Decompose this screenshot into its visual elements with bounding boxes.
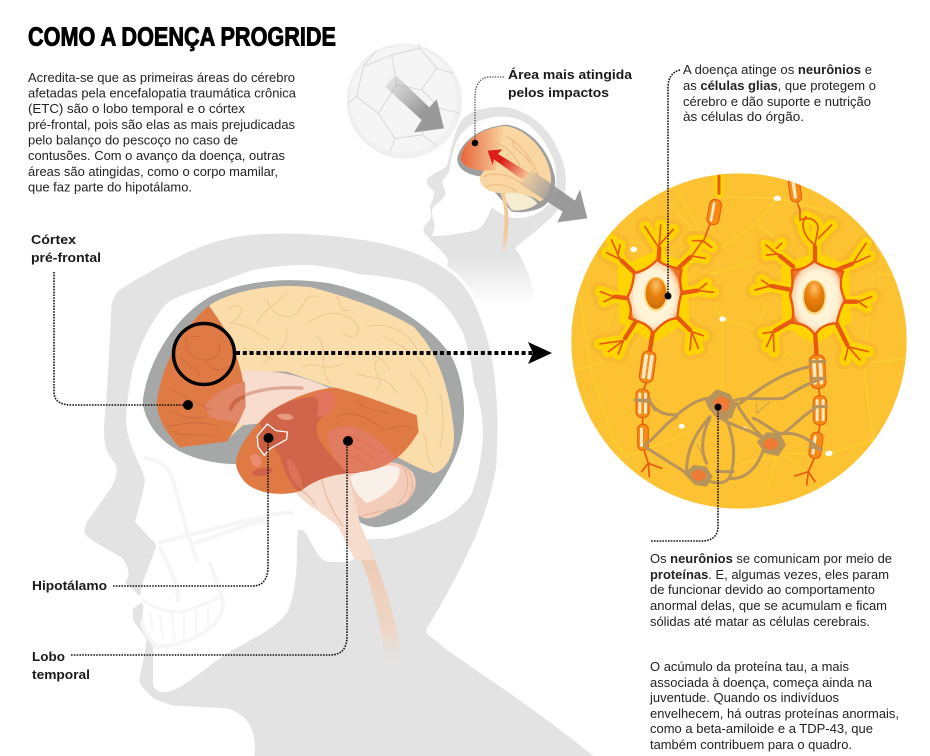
text: proteins: anormal delas, que se acumulam e ficam — [650, 599, 887, 613]
intro text block: que faz parte do hipotálamo. — [28, 180, 192, 194]
small head silhouette — [420, 107, 566, 310]
callout lines and dots: brain regions — [54, 272, 353, 655]
grey skull cavity — [143, 280, 464, 527]
text: proteins: sólidas até matar as células cerebrais. — [650, 615, 870, 629]
neuron circle panel — [571, 173, 907, 509]
intro text block: áreas são atingidas, como o corpo mamilar, — [28, 165, 278, 179]
temporal orange zone — [236, 388, 419, 494]
intro text block: Acredita-se que as primeiras áreas do cérebro — [28, 71, 295, 85]
text: proteins: Os neurônios se comunicam por meio de — [650, 552, 892, 566]
large brain — [143, 280, 464, 560]
text: tau protein: juventude. Quando os indivíduos — [649, 691, 839, 705]
text: tau protein: como a beta-amiloide e a TDP-43, que — [650, 722, 873, 736]
sick neurons — [635, 362, 827, 487]
labels: brain regions: pré-frontal — [31, 250, 101, 265]
inner pale structure — [205, 371, 333, 425]
labels: brain regions: Lobo — [32, 649, 65, 664]
text: proteins — [650, 552, 892, 629]
label: impact area: Área mais atingida — [508, 67, 633, 82]
callout line: impact area — [472, 77, 504, 146]
small cerebrum — [461, 126, 551, 202]
labels: brain regions: Hipotálamo — [32, 578, 107, 593]
text: tau protein — [649, 660, 899, 752]
text: tau protein: associada à doença, começa ainda na — [650, 676, 872, 690]
labels: brain regions: temporal — [32, 667, 90, 682]
intro text block: (ETC) são o lobo temporal e o córtex — [28, 102, 246, 116]
hypothalamus outline — [257, 424, 287, 455]
text: neurons and glial cells: cérebro e dão suporte e nutrição — [683, 95, 871, 109]
text: neurons and glial cells: às células do órgão. — [683, 110, 804, 124]
dark mid-brain overlay — [260, 396, 360, 492]
prefrontal orange zone — [157, 306, 245, 447]
faint skull bones — [142, 458, 292, 647]
text: tau protein: envelhecem, há outras proteínas anormais, — [650, 707, 899, 721]
title: COMO A DOENÇA PROGRIDE — [28, 24, 336, 52]
glial network — [573, 190, 907, 503]
intro text block — [28, 71, 296, 194]
text: neurons and glial cells: as células glias, que protegem o — [683, 79, 876, 93]
spinal cord, large — [353, 540, 402, 664]
text: proteins: proteínas. E, algumas vezes, eles param — [650, 568, 889, 582]
cerebellum and brainstem — [293, 462, 416, 560]
text: neurons and glial cells — [683, 63, 876, 124]
labels: brain regions — [31, 232, 107, 682]
gyri folds — [227, 293, 443, 467]
big grey exit arrow — [520, 170, 587, 222]
skull white interior — [126, 265, 483, 692]
red impact arrow — [488, 149, 530, 180]
white glial dots — [630, 196, 833, 456]
text: tau protein: O acúmulo da proteína tau, a mais — [650, 660, 849, 674]
zoom circle and arrow to neurons — [174, 324, 552, 384]
icon: soccer ball with impact arrow — [347, 43, 462, 159]
label: impact area: pelos impactos — [508, 85, 609, 100]
small brain with impact arrows — [457, 125, 587, 252]
small spinal cord — [503, 193, 507, 252]
large head silhouette — [83, 232, 612, 756]
cream cerebrum — [209, 286, 454, 473]
text: neurons and glial cells: A doença atinge os neurônios e — [683, 63, 872, 77]
intro text block: contusões. Com o avanço da doença, outras — [28, 149, 285, 163]
healthy neuron left — [600, 176, 722, 477]
text: proteins: de funcionar devido ao comportamento — [650, 583, 875, 597]
intro text block: pelo balanço do pescoço no caso de — [28, 134, 238, 148]
small skull cavity — [457, 125, 555, 212]
small skull white interior — [432, 117, 556, 236]
callout lines and dots: neurons — [650, 70, 722, 541]
intro text block: pré-frontal, pois são elas as mais prejudicadas — [28, 118, 295, 132]
label: impact area — [508, 67, 633, 100]
text: tau protein: também contribuem para o quadro. — [650, 738, 852, 752]
intro text block: afetadas pela encefalopatia traumática crônica — [28, 86, 296, 100]
labels: brain regions: Córtex — [31, 232, 77, 247]
healthy neuron right — [755, 177, 872, 485]
